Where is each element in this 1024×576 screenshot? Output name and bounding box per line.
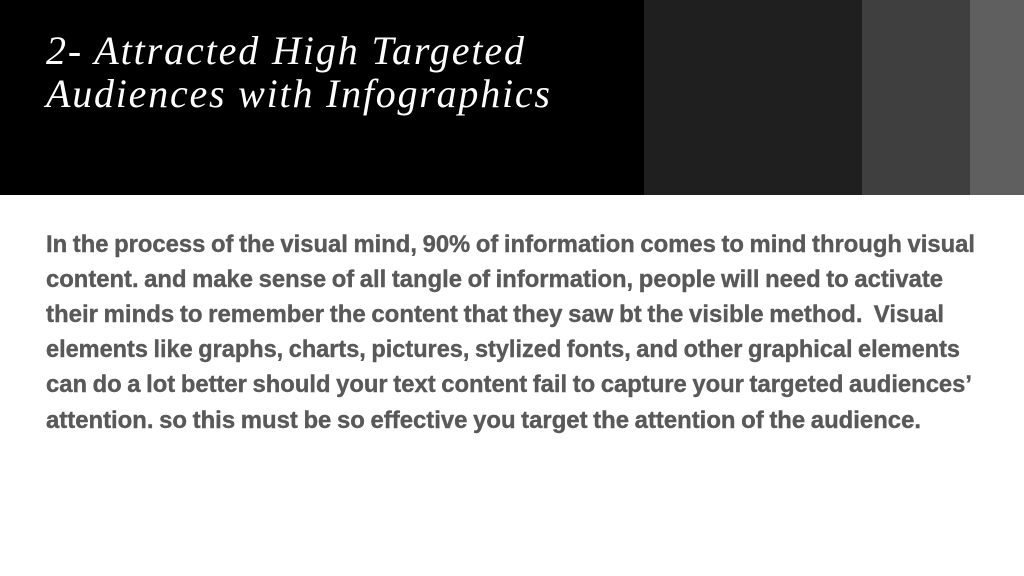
body text: elements like graphs, charts, pictures, stylized fonts, and other graphical elements [46,336,960,363]
body text: In the process of the visual mind, 90% of information comes to mind through visual [46,231,975,258]
header band [0,0,1024,195]
title: 2- Attracted High Targeted [46,28,525,73]
body text: their minds to remember the content that they saw bt the visible method. Visual [46,301,944,328]
body text: attention. so this must be so effective you target the attention of the audience. [46,407,921,434]
body text: content. and make sense of all tangle of information, people will need to activate [46,266,943,293]
title [43,28,550,116]
body text: can do a lot better should your text content fail to capture your targeted audiences’ [46,371,972,398]
body text [46,231,975,434]
title: Audiences with Infographics [43,71,550,116]
